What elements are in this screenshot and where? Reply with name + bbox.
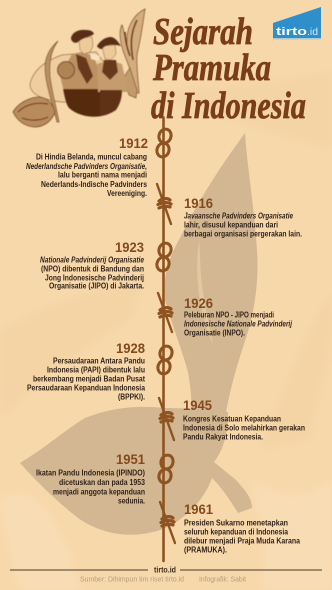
- left leaf: [45, 41, 59, 122]
- entry: 1961: [184, 501, 300, 555]
- entry: 1923: [40, 239, 144, 291]
- entry: 1912: [26, 135, 148, 198]
- entry: 1951: [36, 451, 145, 506]
- illustration backdrop shell: [30, 52, 110, 102]
- entry: 1912: Nederlandsche Padvinders Organisatie,: [26, 161, 147, 171]
- knot: 1916: [157, 184, 171, 224]
- entry: 1926: Indonesische Nationale Padvinderij: [184, 319, 292, 329]
- entry: 1912: Di Hindia Belanda, muncul cabang: [36, 152, 147, 162]
- entry: 1926: Organisatie (INPO).: [184, 328, 245, 338]
- knot: 1923: [155, 241, 173, 273]
- entry: 1926: Peleburan NPO - JIPO menjadi: [184, 310, 274, 320]
- entry: 1916: Javaansche Padvinders Organisatie: [184, 211, 293, 221]
- entry: 1916: berbagai organisasi pergerakan lain.: [184, 229, 302, 239]
- entry: 1961: 1961: [184, 501, 213, 517]
- logo: tirto.id: [273, 7, 321, 40]
- entry: 1951: Ikatan Pandu Indonesia (IPINDO): [36, 468, 145, 478]
- footer: [10, 566, 322, 584]
- entry: 1926: 1926: [184, 295, 213, 311]
- entry: 1923: Organisatie (JIPO) di Jakarta.: [49, 281, 144, 291]
- entry: 1951: 1951: [116, 451, 145, 467]
- entry: 1912: lalu berganti nama menjadi: [58, 170, 147, 180]
- entry: 1945: [183, 397, 305, 442]
- entry: 1961: (PRAMUKA).: [184, 545, 227, 555]
- title: Pramuka: [152, 47, 271, 89]
- entry: 1916: [184, 195, 302, 239]
- entry: 1928: 1928: [116, 340, 145, 356]
- leaf: upper background leaf: [165, 133, 258, 412]
- footer: tirto.id: [154, 566, 176, 574]
- entry: 1945: Kongres Kesatuan Kepanduan: [183, 414, 281, 424]
- boy scout: [58, 30, 102, 117]
- entry: 1961: seluruh kepanduan di Indonesia: [184, 527, 288, 537]
- entry: 1961: Presiden Sukarno menetapkan: [184, 518, 288, 528]
- knot: 1945: [159, 398, 174, 440]
- logo: tirto.id: .id: [307, 27, 318, 38]
- entry: 1912: Nederlands-Indische Padvinders: [41, 179, 147, 189]
- entry: 1928: Indonesia (PAPI) dibentuk lalu: [47, 365, 145, 375]
- entry: 1926: [184, 295, 292, 338]
- footer: Sumber: Dihimpun tim riset tirto.id: [80, 574, 184, 584]
- entry: 1923: Nationale Padvinderij Organisatie: [40, 255, 144, 265]
- entry: 1928: (BPPKI).: [118, 392, 145, 402]
- entry: 1961: dilebur menjadi Praja Muda Karana: [184, 536, 300, 546]
- entry: 1951: dicetuskan dan pada 1953: [59, 477, 145, 487]
- entry: 1951: menjadi anggota kepanduan: [53, 487, 145, 497]
- title: [151, 11, 306, 127]
- entry: 1945: Pandu Rakyat Indonesia.: [183, 432, 263, 442]
- entry: 1928: [27, 340, 145, 402]
- knot: 1951: [157, 453, 175, 485]
- knot: 1912: [155, 127, 173, 159]
- entry: 1928: Persaudaraan Kepanduan Indonesia: [27, 383, 145, 393]
- knot: 1928: [156, 344, 174, 376]
- title: Sejarah: [153, 11, 253, 53]
- entry: 1912: 1912: [119, 135, 148, 151]
- entry: 1916: lahir, disusul kepanduan dari: [184, 220, 278, 230]
- entry: 1928: berkembang menjadi Badan Pusat: [33, 374, 145, 384]
- entry: 1951: sedunia.: [118, 496, 145, 506]
- right leaf: [120, 9, 145, 98]
- entry: 1928: Persaudaraan Antara Pandu: [53, 356, 145, 366]
- entry: 1923: (NPO) dibentuk di Bandung dan: [41, 264, 144, 274]
- entry: 1923: 1923: [115, 239, 144, 255]
- logo: tirto.id: tirto: [276, 26, 307, 38]
- timeline rope with knots: [155, 118, 175, 561]
- knot: 1926: [158, 293, 172, 332]
- entry: 1912: Vereeniging.: [107, 188, 147, 198]
- entry: 1945: 1945: [183, 397, 212, 413]
- knot: 1961: [160, 502, 175, 543]
- entry: 1923: Jong Indonesische Padvinderij: [45, 273, 144, 283]
- entry: 1916: 1916: [184, 195, 213, 211]
- footer: Infografik: Sabit: [199, 574, 247, 584]
- coconut: [13, 97, 55, 127]
- girl scout: [97, 37, 128, 116]
- leaf: lower background leaf: [20, 407, 252, 535]
- illustration: scouts with coconut and leaves: [13, 9, 145, 127]
